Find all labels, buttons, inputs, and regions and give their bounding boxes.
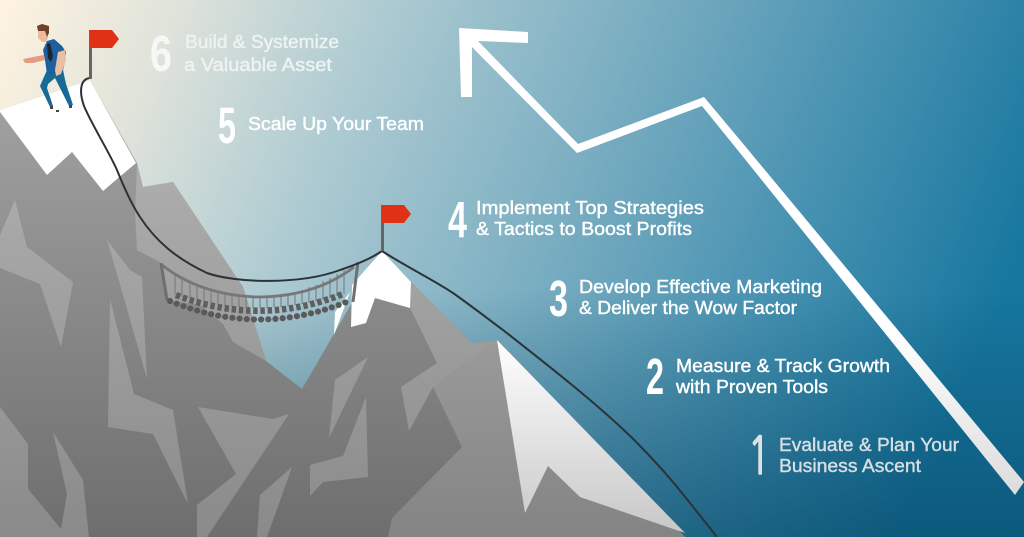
step 5: Scale Up Your Team <box>248 114 424 134</box>
bridge upper planks <box>176 294 343 311</box>
step 4 <box>448 191 704 248</box>
suspension bridge <box>161 262 358 320</box>
rock facets <box>0 200 497 537</box>
climbing rope <box>81 78 717 537</box>
bridge posts <box>161 262 358 302</box>
pointing arm <box>23 55 45 63</box>
middle peak flag <box>381 205 411 251</box>
step 6: a Valuable Asset <box>184 55 332 75</box>
step 3: & Deliver the Wow Factor <box>579 298 797 318</box>
step 1 <box>748 431 959 482</box>
head <box>38 30 48 42</box>
step 4: & Tactics to Boost Profits <box>476 219 692 239</box>
summit snow <box>0 80 136 191</box>
legs <box>40 70 73 107</box>
step 2: Measure & Track Growth <box>676 356 890 376</box>
step 6: Build & Systemize <box>185 32 339 52</box>
step 1: Business Ascent <box>779 456 921 476</box>
step 3: Develop Effective Marketing <box>579 277 822 297</box>
mountain range <box>0 80 685 537</box>
middle peak snow <box>334 251 411 335</box>
back mountain lit face <box>135 163 266 361</box>
step 3 <box>549 270 822 327</box>
step 6: 6 <box>150 25 172 82</box>
step 1: Evaluate & Plan Your <box>779 435 959 455</box>
step 1: 1 <box>748 431 770 482</box>
step 2 <box>646 348 890 405</box>
bridge rail <box>162 265 354 297</box>
torso <box>43 39 66 74</box>
shoes <box>50 105 72 112</box>
tie <box>47 43 53 62</box>
summit flag <box>89 30 119 79</box>
bridge hangers <box>175 270 344 308</box>
front mountain <box>388 340 685 537</box>
rising white arrow <box>459 28 1024 495</box>
bridge lower planks <box>170 301 349 320</box>
step 5: 5 <box>218 97 236 154</box>
step 4: 4 <box>448 191 467 248</box>
front arm <box>55 50 66 76</box>
step 6 <box>150 25 339 82</box>
hair <box>37 24 49 37</box>
front mountain snow <box>497 340 685 533</box>
step 2: 2 <box>646 348 664 405</box>
step 2: with Proven Tools <box>675 377 828 397</box>
step 4: Implement Top Strategies <box>476 198 704 218</box>
mountain silhouette <box>0 80 685 537</box>
step 3: 3 <box>549 270 568 327</box>
climber figure <box>23 24 73 112</box>
step 5 <box>218 97 424 154</box>
